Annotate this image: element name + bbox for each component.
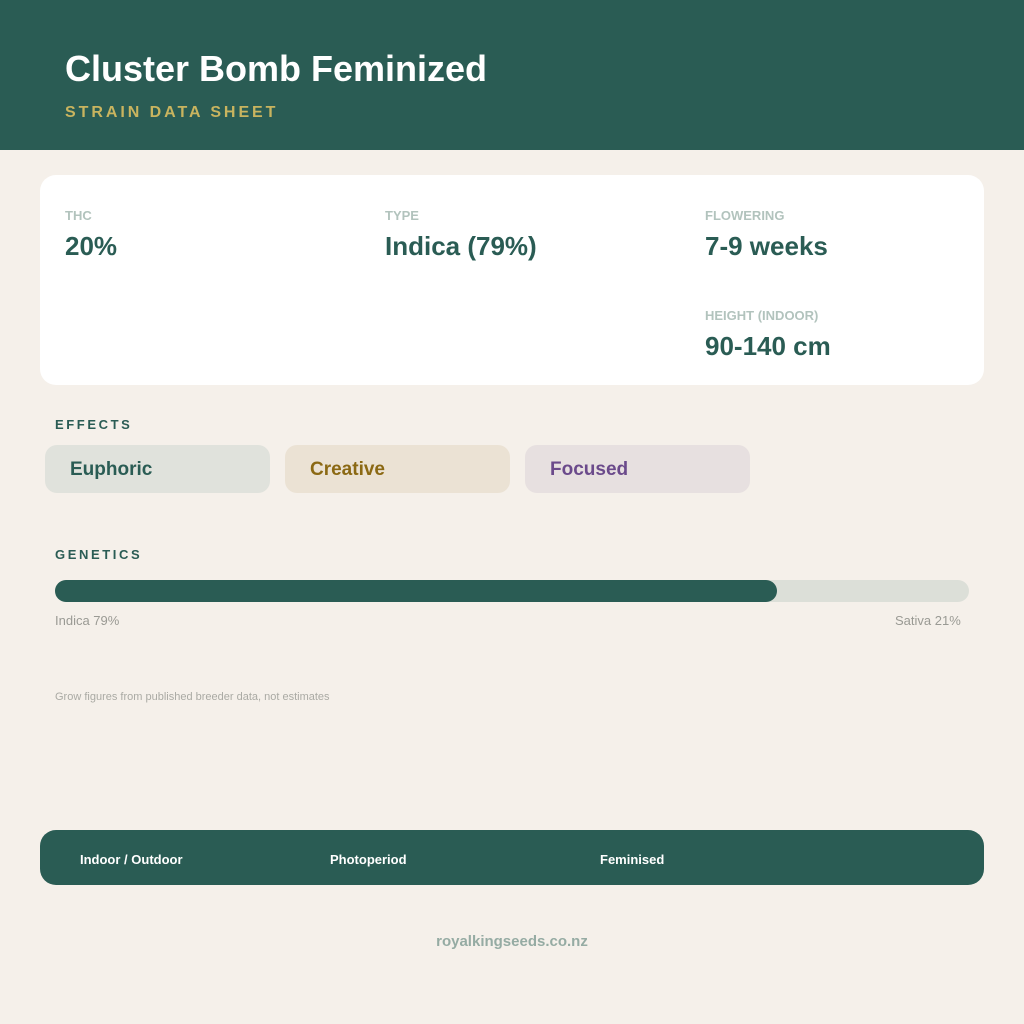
label: sativa percent: Sativa 21% [895,613,961,628]
heading: genetics: GENETICS [55,547,142,562]
effect pill: Creative [285,445,510,493]
subtitle: STRAIN DATA SHEET [65,104,278,121]
feature: indoor or outdoor: Indoor / Outdoor [80,852,183,867]
stat: THC: THC [65,208,92,223]
feature: photoperiod: Photoperiod [330,852,407,867]
panel: strain stats [40,175,984,385]
label: indica percent: Indica 79% [55,613,119,628]
stat: type: Indica (79%) [385,231,537,261]
effect pill: Euphoric [45,445,270,493]
stat: type: TYPE [385,208,419,223]
header banner [0,0,1024,150]
footer feature bar [40,830,984,885]
stat: indoor height: HEIGHT (INDOOR) [705,308,818,323]
stat: flowering: FLOWERING [705,208,784,223]
stat: THC: 20% [65,231,117,261]
effect pill: Focused: Focused [550,459,628,480]
website address: royalkingseeds.co.nz [436,933,588,950]
title: Cluster Bomb Feminized [65,48,487,89]
heading: effects: EFFECTS [55,417,132,432]
stat: indoor height: 90-140 cm [705,331,831,361]
indica share bar [55,580,777,602]
source note: Grow figures from published breeder data, not estimates [55,691,330,703]
effect pill: Euphoric: Euphoric [70,459,152,480]
stat: indoor height [705,308,831,361]
genetics bar chart [55,580,969,602]
stat: flowering: 7-9 weeks [705,231,828,261]
effect pill: Focused [525,445,750,493]
stat: type [385,208,537,261]
stat: THC [65,208,117,261]
effect pill: Creative: Creative [310,459,385,480]
stat: flowering [705,208,828,261]
feature: feminised: Feminised [600,852,664,867]
